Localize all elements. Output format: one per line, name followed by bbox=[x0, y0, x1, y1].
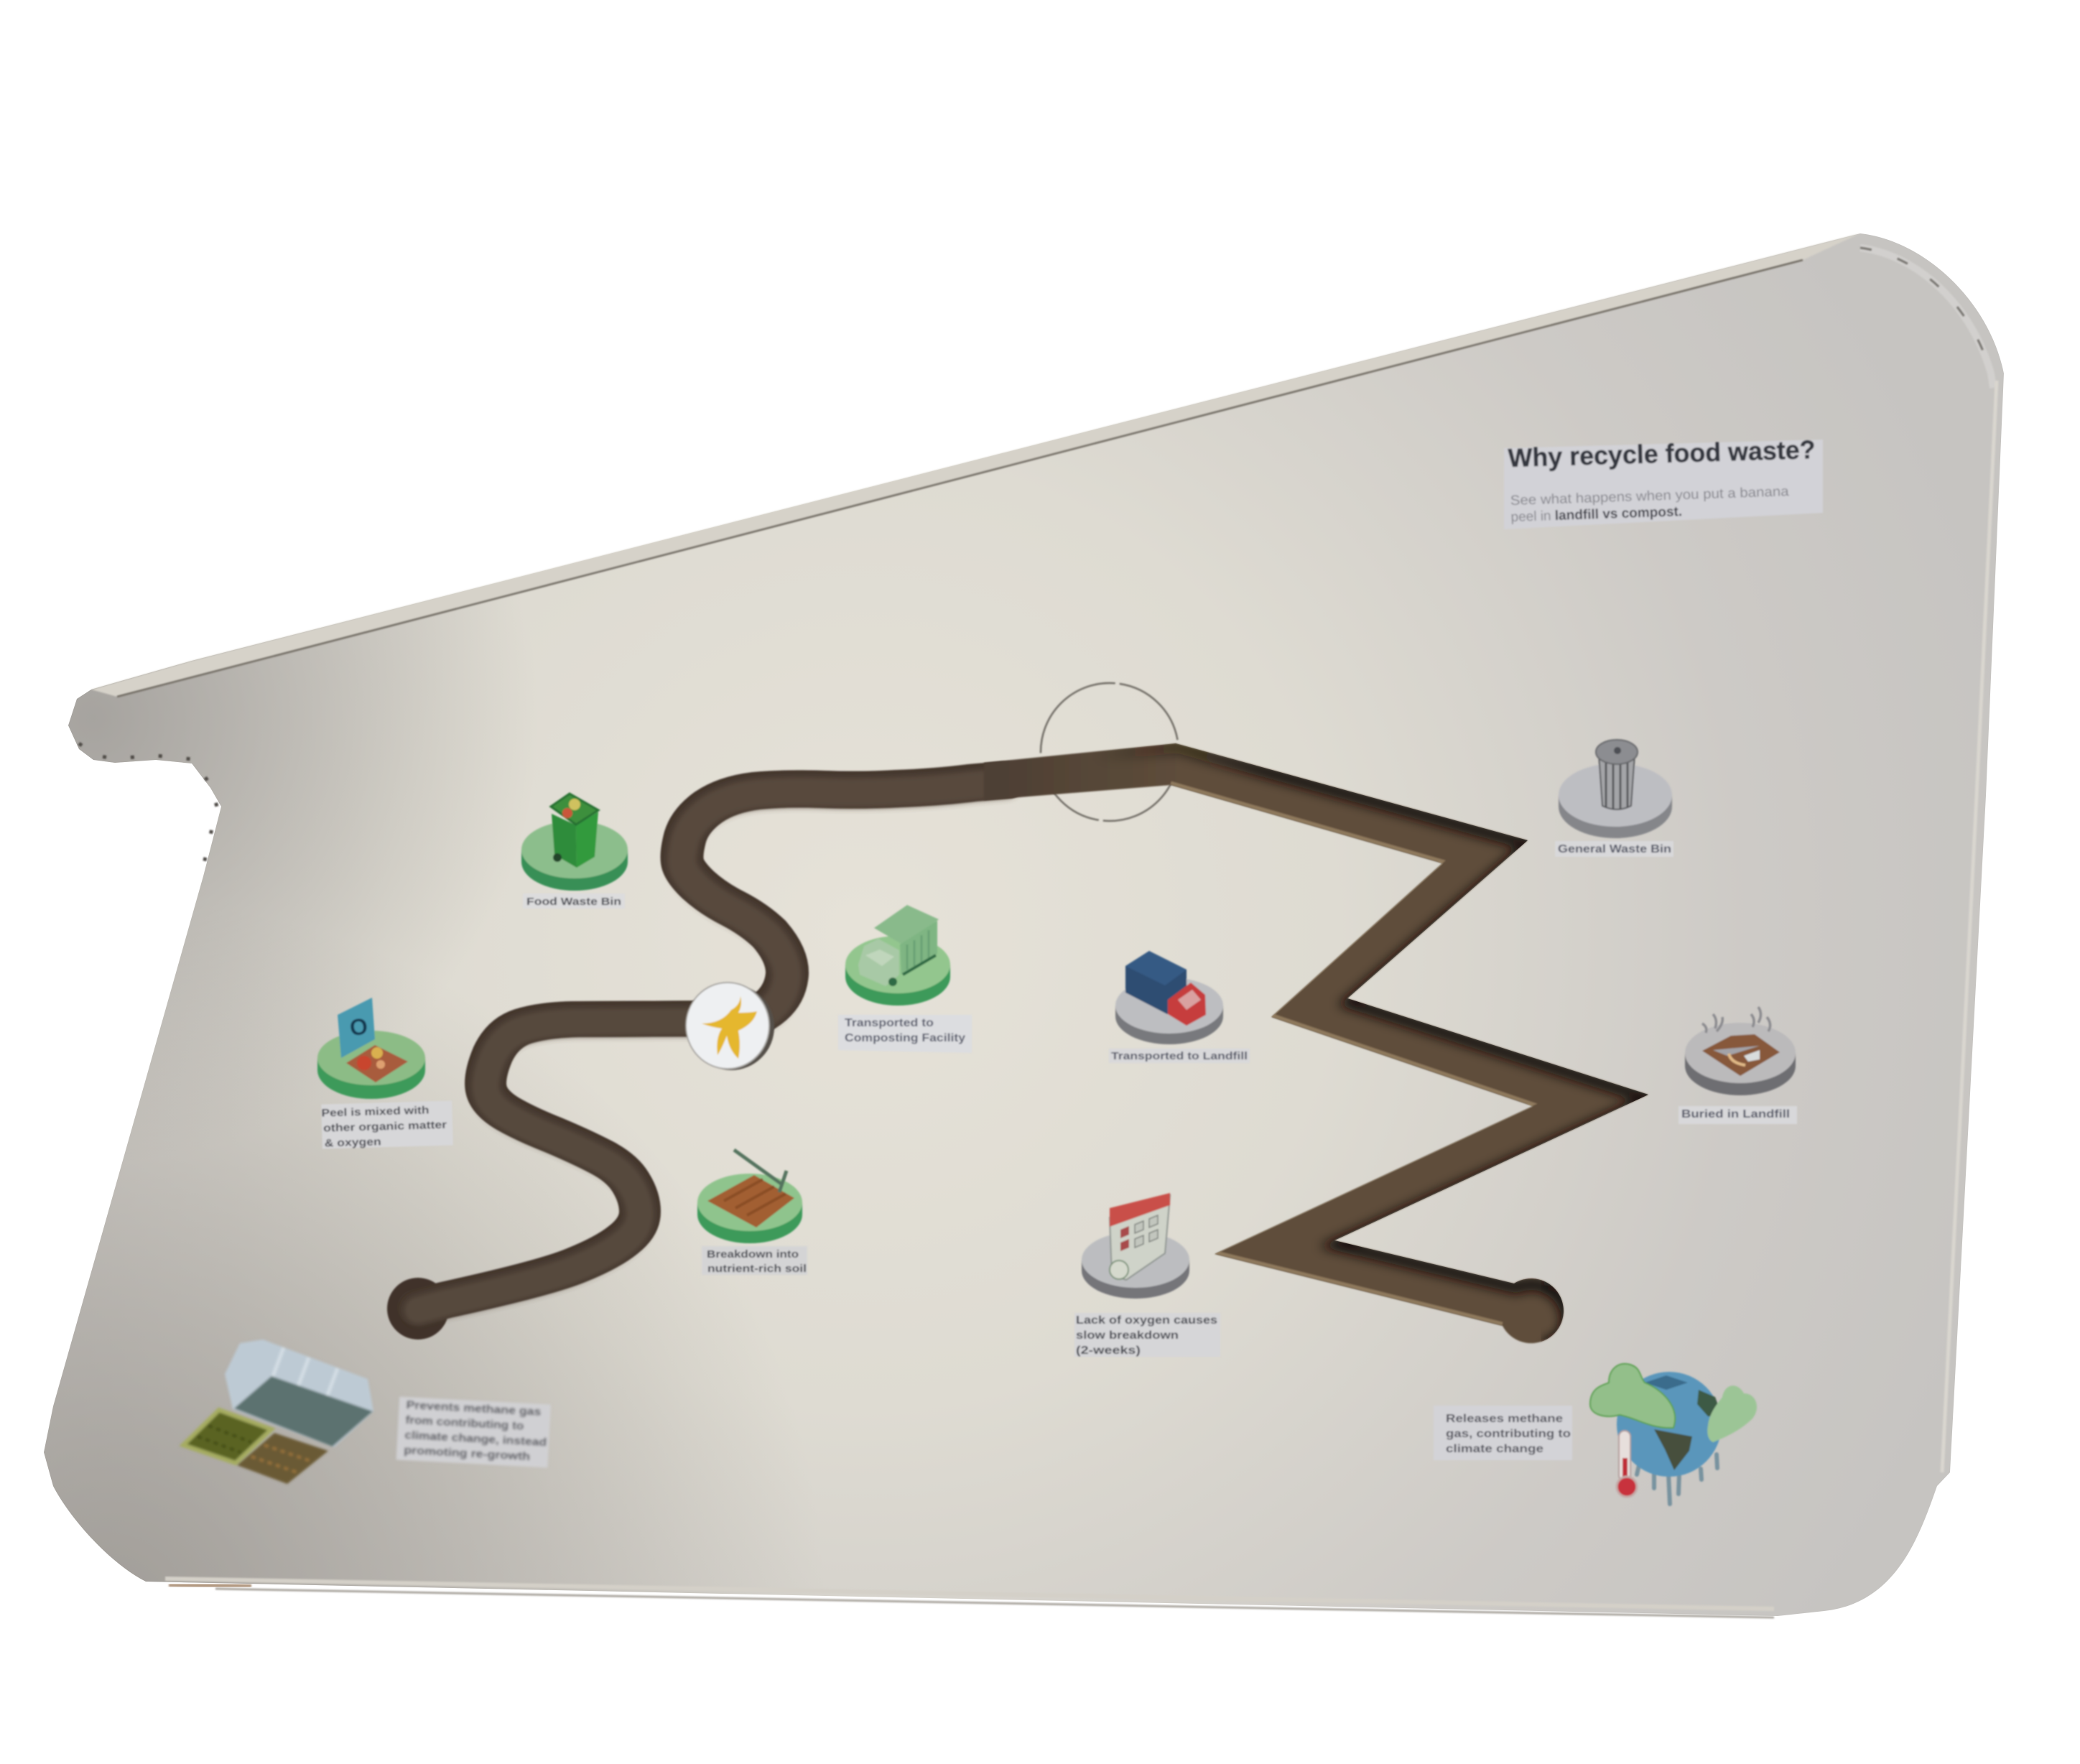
stage: peel is mixed with organic matter bbox=[317, 998, 453, 1150]
disc: green platform bbox=[521, 821, 628, 891]
label bbox=[702, 1246, 807, 1275]
icon: left methane cloud bbox=[1590, 1364, 1675, 1428]
label: slow breakdown bbox=[1076, 1329, 1179, 1342]
icon: melting globe bbox=[1617, 1372, 1722, 1504]
icon: oxygen element card bbox=[338, 998, 375, 1058]
compost path: winding groove to the left bbox=[387, 780, 1008, 1340]
label: General Waste Bin bbox=[1558, 843, 1671, 855]
outcome text: prevents methane: from contributing to bbox=[405, 1414, 524, 1433]
heading: Why recycle food waste? bbox=[1508, 435, 1816, 473]
icon: green truck bbox=[858, 905, 939, 986]
label bbox=[1555, 841, 1673, 857]
icon: banana peel bbox=[702, 996, 757, 1059]
icon: right methane cloud bbox=[1707, 1385, 1757, 1442]
stage: food waste bin bbox=[521, 794, 628, 909]
label: Breakdown into bbox=[707, 1248, 799, 1261]
label: (2-weeks) bbox=[1076, 1345, 1141, 1357]
subheading: See what happens when you put a banana bbox=[1510, 484, 1789, 509]
stage: breakdown into nutrient-rich soil bbox=[697, 1150, 807, 1275]
outcome text: releases methane: Releases methane bbox=[1446, 1413, 1563, 1425]
outcome text: releases methane: climate change bbox=[1446, 1443, 1543, 1455]
icon: garden tool bbox=[734, 1150, 786, 1192]
icon: greenhouse bed bbox=[234, 1376, 373, 1447]
label: & oxygen bbox=[324, 1136, 381, 1149]
label: Transported to bbox=[845, 1017, 934, 1029]
label bbox=[523, 893, 625, 909]
label bbox=[1679, 1106, 1797, 1124]
subheading: landfill vs compost. bbox=[1554, 504, 1682, 524]
outcome text: prevents methane: Prevents methane gas bbox=[406, 1399, 542, 1419]
label: Composting Facility bbox=[845, 1032, 965, 1044]
disc: grey platform bbox=[1115, 978, 1223, 1044]
disc: green platform bbox=[697, 1174, 802, 1243]
icon: organic matter heap bbox=[346, 1045, 408, 1082]
subheading: peel in bbox=[1510, 509, 1555, 525]
label: Food Waste Bin bbox=[526, 896, 621, 908]
label bbox=[1074, 1313, 1220, 1357]
label bbox=[838, 1015, 972, 1053]
icon: glass dome bbox=[225, 1340, 373, 1447]
label: Peel is mixed with bbox=[321, 1104, 430, 1120]
icon: buried peel in soil bbox=[1702, 1034, 1780, 1076]
label bbox=[321, 1100, 453, 1150]
stage: general waste bin bbox=[1555, 740, 1673, 857]
disc: green platform bbox=[317, 1031, 425, 1099]
outcome text: prevents methane bbox=[396, 1397, 551, 1467]
label: other organic matter bbox=[323, 1119, 447, 1135]
disc: green platform bbox=[845, 936, 950, 1006]
disc: grey platform bbox=[1082, 1232, 1189, 1299]
icon: green bin bbox=[551, 794, 598, 868]
banana peel token on the path bbox=[686, 983, 774, 1070]
disc: grey platform bbox=[1685, 1023, 1796, 1095]
outcome text: releases methane bbox=[1434, 1406, 1572, 1460]
icon: soil patch bbox=[707, 1175, 794, 1227]
stage: transported to composting facility bbox=[838, 905, 972, 1053]
stage: transported to landfill bbox=[1109, 951, 1250, 1063]
stage: lack of oxygen bbox=[1074, 1193, 1220, 1357]
icon: oxygen element card: O bbox=[348, 1013, 369, 1041]
outcome text: prevents methane: climate change, instead bbox=[404, 1429, 547, 1449]
landfill path: angular zig-zag groove to the right bbox=[984, 743, 1650, 1353]
icon: trash can bbox=[1596, 740, 1638, 809]
icon: blue lorry bbox=[1125, 951, 1206, 1026]
icon: green seed tray bbox=[183, 1410, 271, 1463]
icon: calendar bbox=[1110, 1193, 1170, 1280]
label: Buried in Landfill bbox=[1681, 1108, 1790, 1120]
outcome text: prevents methane: promoting re-growth bbox=[404, 1444, 531, 1463]
icon: thermometer bbox=[1617, 1431, 1637, 1497]
disc: grey platform bbox=[1559, 763, 1672, 838]
board: plywood display panel bbox=[44, 233, 2004, 1617]
label: Transported to Landfill bbox=[1111, 1050, 1248, 1062]
cut-out circle on the board at the fork bbox=[1041, 683, 1179, 821]
outcome: greenhouse illustration bbox=[183, 1340, 373, 1484]
stage: buried in landfill bbox=[1679, 1007, 1797, 1124]
icon: brown seed tray bbox=[237, 1433, 328, 1484]
outcome: melting earth with methane clouds and thermometer bbox=[1590, 1364, 1757, 1504]
label: Lack of oxygen causes bbox=[1076, 1314, 1217, 1327]
outcome text: releases methane: gas, contributing to bbox=[1446, 1428, 1571, 1440]
title plate bbox=[1504, 435, 1823, 529]
label: nutrient-rich soil bbox=[707, 1263, 807, 1275]
icon: rising fumes bbox=[1702, 1007, 1770, 1033]
